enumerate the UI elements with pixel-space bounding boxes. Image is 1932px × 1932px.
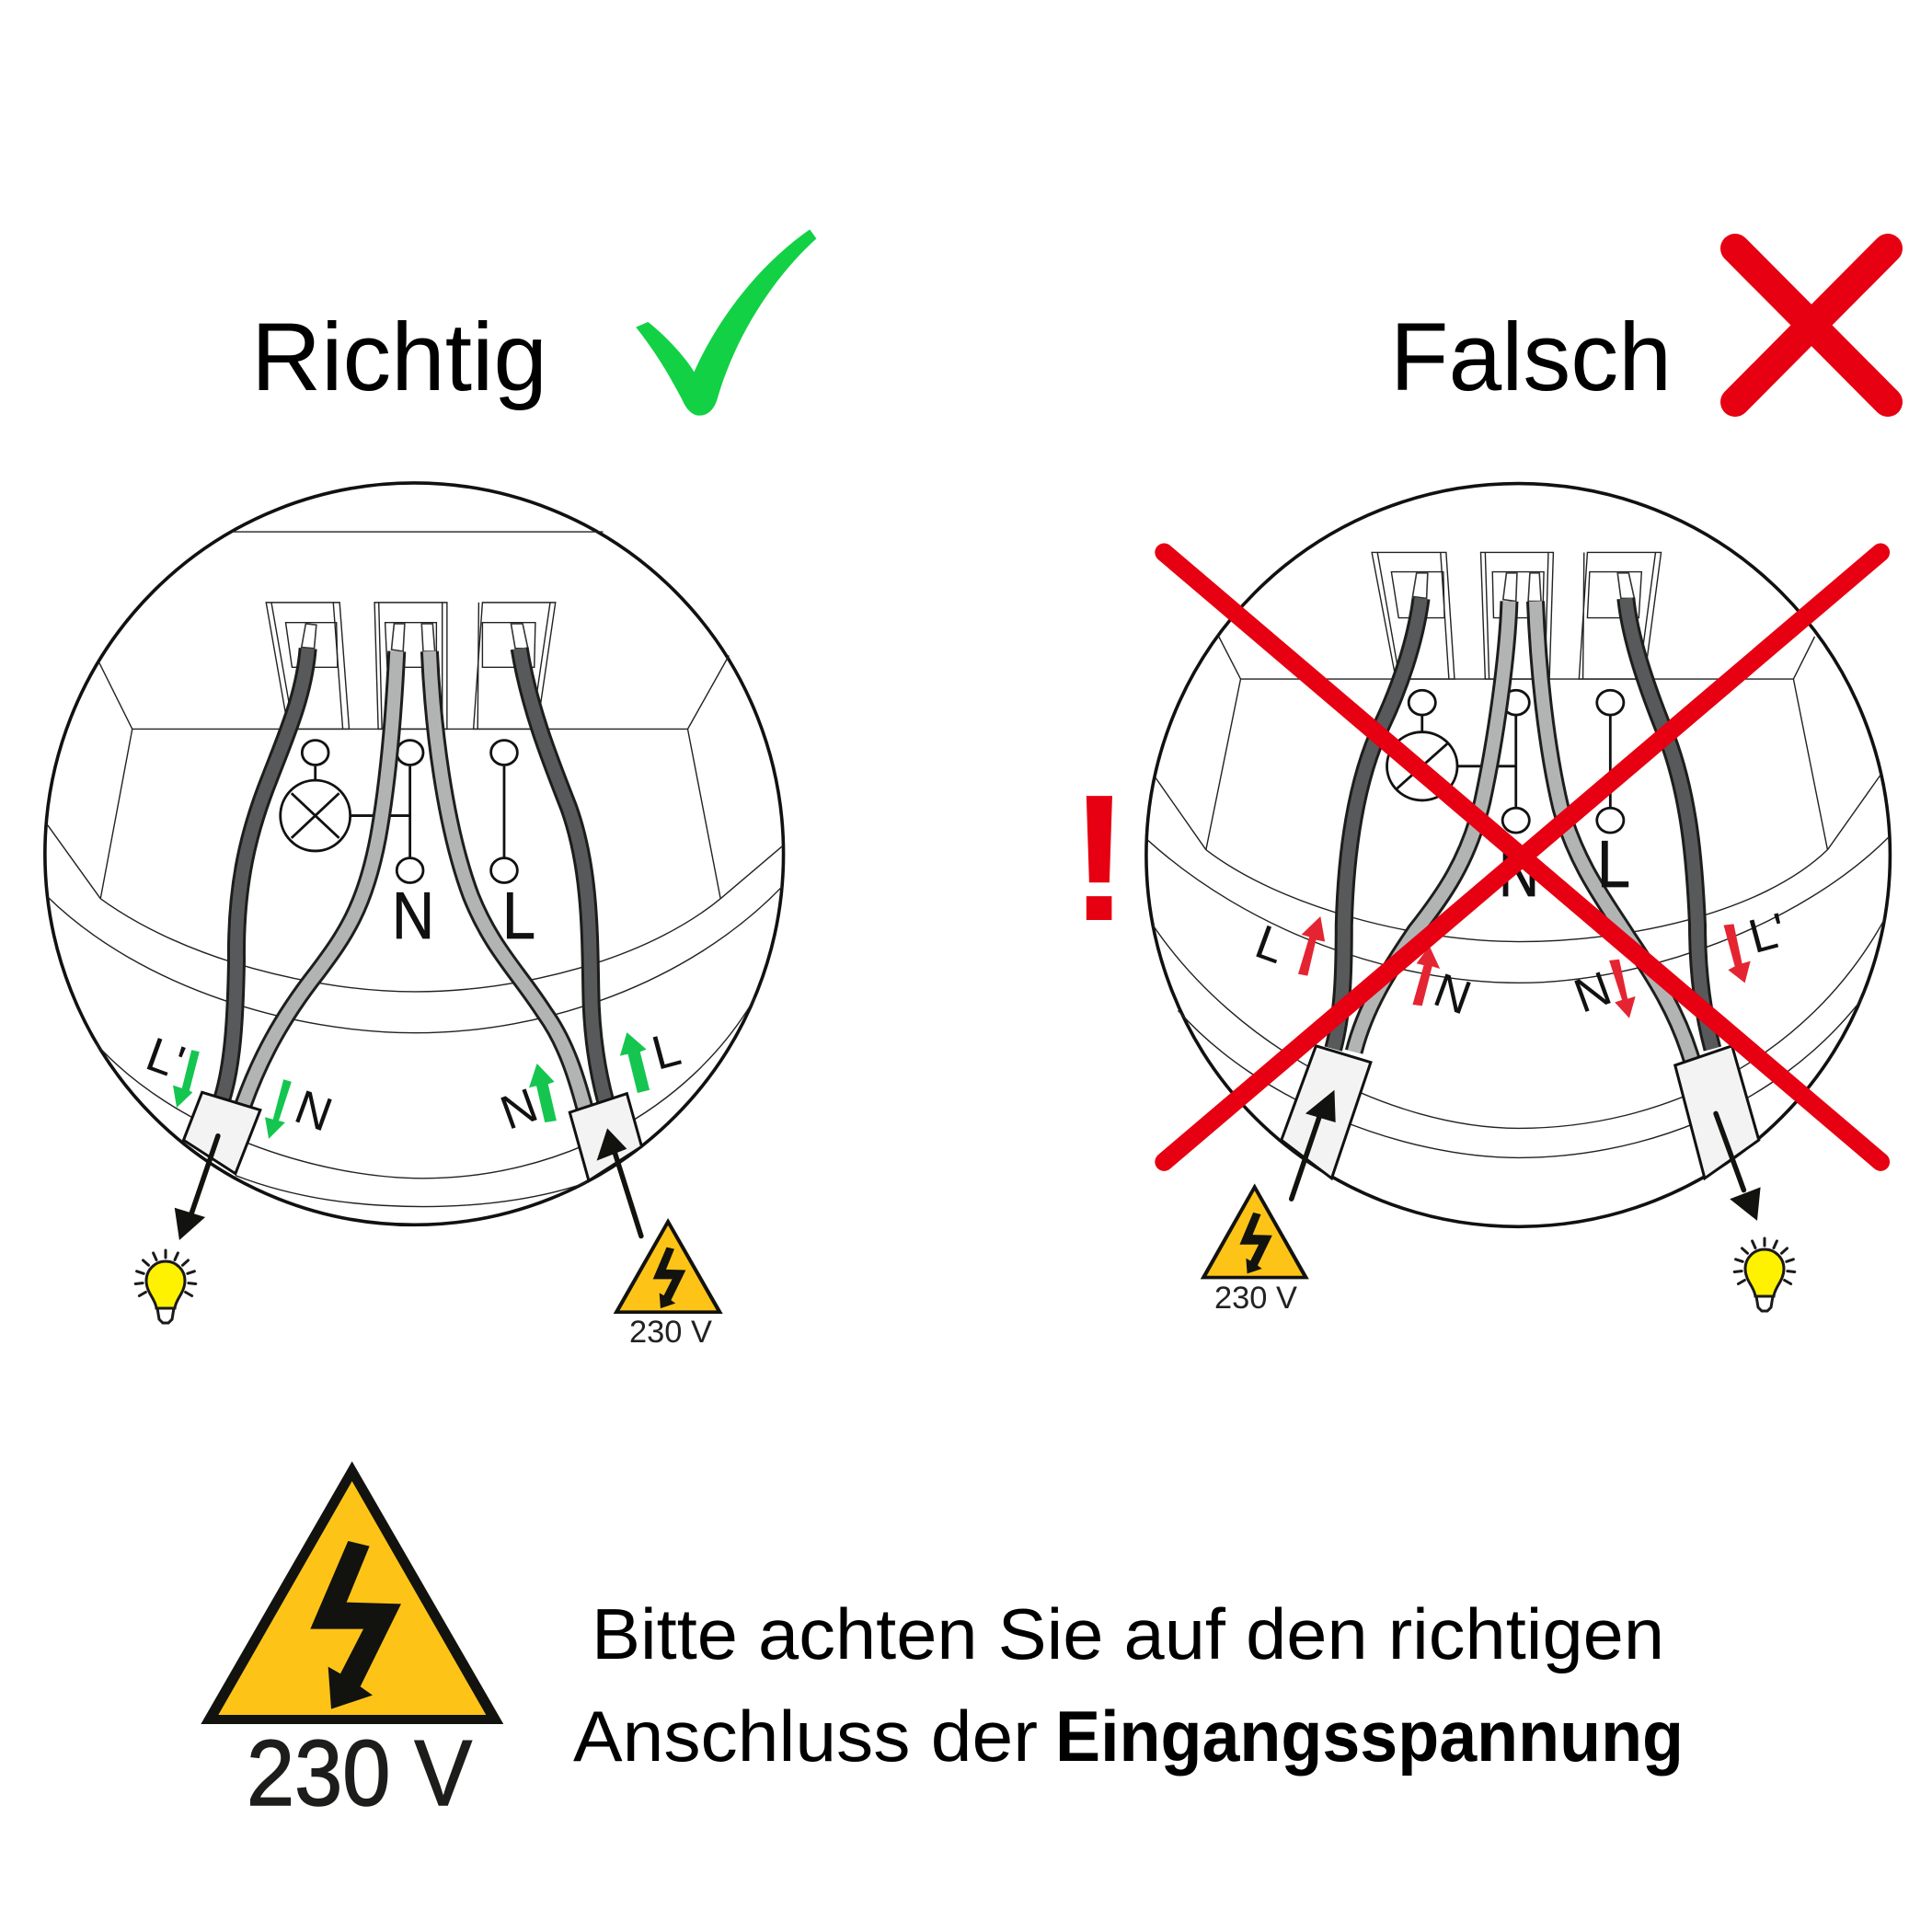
wires xyxy=(1333,598,1712,1061)
housing lines xyxy=(1147,552,1889,1157)
large label: 230 V: 230 V xyxy=(247,1722,472,1825)
terminal labels: N xyxy=(1499,837,1539,911)
wire labels, correct: L' xyxy=(139,1028,191,1090)
wire labels, correct: N xyxy=(494,1078,545,1141)
wire labels, wrong: N xyxy=(1427,963,1478,1026)
label: 230 V: 230 V xyxy=(1214,1281,1297,1316)
icon: light bulb xyxy=(135,1250,196,1323)
wire labels, correct xyxy=(139,1022,686,1143)
circle outline xyxy=(45,483,784,1225)
text block: notice: Bitte achten Sie auf den richtigen xyxy=(592,1593,1664,1674)
red current arrows xyxy=(1298,916,1751,1018)
wire connectors xyxy=(1282,1046,1759,1179)
wire labels, wrong: L xyxy=(1248,915,1292,974)
wire connectors xyxy=(184,1092,641,1180)
large red cross over diagram xyxy=(1164,552,1880,1162)
terminal labels: L xyxy=(502,880,535,953)
wires xyxy=(221,649,605,1108)
black arrows xyxy=(1292,1090,1761,1221)
panel: correct wiring diagram xyxy=(45,483,784,1350)
sensor drawing, correct xyxy=(45,483,784,1240)
bare wire ends xyxy=(302,624,528,651)
wire labels, wrong: N xyxy=(1568,961,1618,1024)
panel: wrong wiring diagram xyxy=(1146,484,1890,1316)
text block: notice: Eingangsspannung xyxy=(1055,1696,1684,1777)
terminal labels: L xyxy=(1597,828,1630,902)
bare wire ends xyxy=(1412,573,1634,602)
terminal labels xyxy=(1499,828,1630,911)
green current arrows xyxy=(173,1032,650,1139)
icon: red cross mark xyxy=(1735,248,1888,402)
housing lines xyxy=(48,532,783,1207)
wire labels, wrong xyxy=(1248,903,1792,1026)
sensor drawing, wrong xyxy=(1146,484,1890,1226)
icon: light bulb xyxy=(1734,1238,1795,1311)
heading: Richtig: Richtig xyxy=(251,304,547,411)
large warning triangle xyxy=(201,1461,503,1724)
circuit symbol xyxy=(281,741,517,883)
heading: Falsch: Falsch xyxy=(1390,304,1672,411)
wire labels, correct: L xyxy=(647,1022,686,1081)
exclamation mark: ! xyxy=(1069,757,1130,959)
circle outline xyxy=(1146,484,1890,1226)
terminal labels xyxy=(392,880,535,953)
label: 230 V: 230 V xyxy=(629,1315,712,1350)
text block: notice: Anschluss der xyxy=(573,1696,1038,1777)
wire labels, correct: N xyxy=(288,1080,339,1143)
wire labels, wrong: L' xyxy=(1743,903,1792,964)
icon: 230 V warning triangle xyxy=(1201,1183,1309,1279)
terminal labels: N xyxy=(392,880,434,953)
black arrows xyxy=(175,1128,641,1240)
text block: notice xyxy=(573,1593,1684,1777)
icon: green check mark xyxy=(636,229,816,416)
icon: 230 V warning triangle xyxy=(614,1218,723,1314)
circuit symbol xyxy=(1387,690,1624,833)
